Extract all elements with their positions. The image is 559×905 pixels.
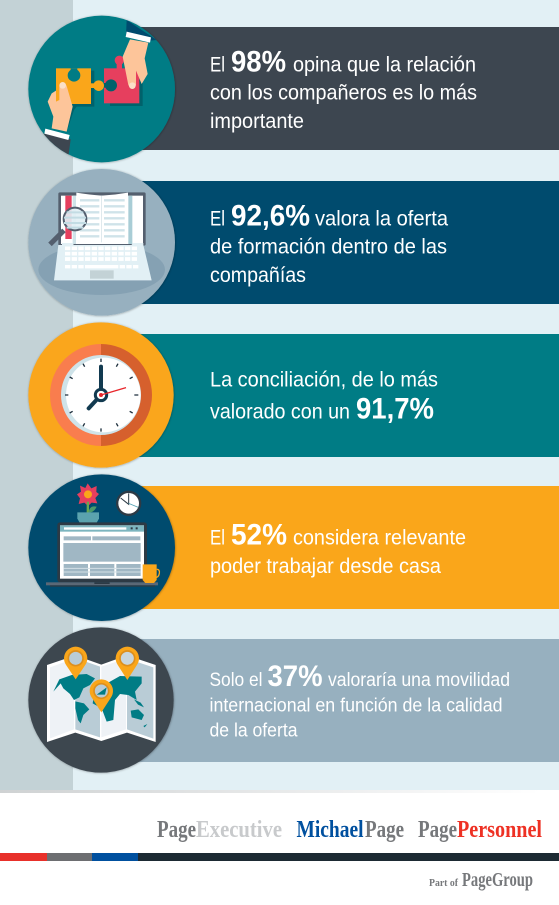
text 5: Solo el xyxy=(210,669,262,691)
left side band xyxy=(0,0,73,790)
bar 2 xyxy=(120,181,559,304)
text 1: importante xyxy=(210,109,304,133)
text 5: internacional en función de la calidad xyxy=(210,694,502,716)
text 2: valora la oferta xyxy=(315,206,448,230)
bar 5 xyxy=(120,639,559,762)
text 5 xyxy=(210,660,510,742)
footer xyxy=(0,790,559,905)
logo: PagePersonnel: Personnel xyxy=(457,817,542,843)
text 1: con los compañeros es lo más xyxy=(210,80,477,104)
flower xyxy=(77,483,99,523)
text 1: El xyxy=(210,52,225,76)
text 1: 98% xyxy=(231,46,286,78)
wall clock xyxy=(116,491,141,516)
text 2: de formación dentro de las xyxy=(210,234,447,258)
text 4: El xyxy=(210,526,225,550)
bar 4 xyxy=(120,486,559,609)
text 1 xyxy=(210,46,477,133)
text 4: 52% xyxy=(231,518,287,552)
icon: desk with laptop xyxy=(28,474,175,621)
logo: PageExecutive xyxy=(157,817,282,843)
text 4 xyxy=(210,518,466,578)
icon: world map xyxy=(28,627,174,773)
text 3: 91,7% xyxy=(356,392,434,426)
text 5: 37% xyxy=(268,660,322,693)
logo: MichaelPage: Page xyxy=(365,817,404,843)
text 3: La conciliación, de lo más xyxy=(210,368,438,392)
text 3 xyxy=(210,368,438,426)
icon: clock xyxy=(28,322,174,468)
text 5: valoraría una movilidad xyxy=(328,669,510,691)
logo: PageExecutive: Page xyxy=(157,817,196,843)
cup xyxy=(143,564,159,583)
text 3: valorado con un xyxy=(210,400,350,424)
text 4: poder trabajar desde casa xyxy=(210,554,441,578)
text 1: opina que la relación xyxy=(293,52,476,76)
map pins xyxy=(64,647,139,712)
part of PageGroup xyxy=(429,869,533,891)
text 4: considera relevante xyxy=(293,526,466,550)
logo: PagePersonnel: Page xyxy=(418,817,457,843)
text 2 xyxy=(210,200,448,287)
logo: PageExecutive: Executive xyxy=(196,817,282,843)
logo: PagePersonnel xyxy=(418,817,542,843)
bar 3 xyxy=(120,334,559,457)
text 2: El xyxy=(210,206,225,230)
icon: puzzle and hands xyxy=(28,16,175,162)
colour strip xyxy=(0,853,559,861)
text 2: compañías xyxy=(210,263,306,287)
icon: book and laptop xyxy=(28,169,175,316)
text 2: 92,6% xyxy=(231,200,310,232)
bar 1 xyxy=(120,27,559,150)
part of PageGroup: Part of xyxy=(429,877,458,889)
laptop xyxy=(46,522,158,587)
logo: MichaelPage: Michael xyxy=(296,817,364,843)
part of PageGroup: PageGroup xyxy=(462,869,533,891)
text 5: de la oferta xyxy=(210,720,298,742)
